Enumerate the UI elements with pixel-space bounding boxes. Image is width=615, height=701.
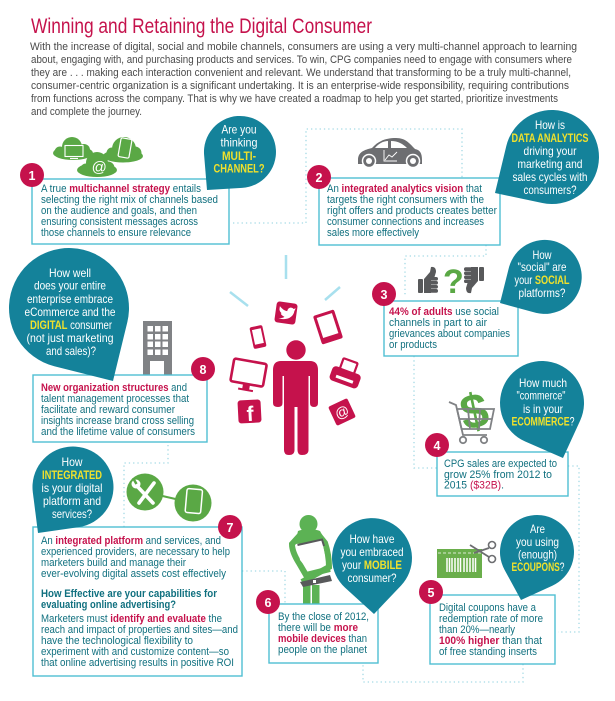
question bubble 7: is your digital (42, 481, 102, 495)
body text: marketers build and manage their (41, 557, 186, 569)
text box (32, 179, 229, 244)
intro paragraph: from functions across the company. That is why we have created a roadmap to help you get started, prioritize investments (31, 93, 558, 105)
icon: tablet (313, 309, 343, 345)
question bubble 7: INTEGRATED (42, 468, 102, 482)
icon: twitter (274, 301, 298, 325)
question bubble 6: consumer? (348, 571, 397, 585)
body text: A true multichannel strategy entails (41, 183, 201, 195)
text box (437, 452, 568, 496)
intro paragraph: and complete the journey. (31, 106, 142, 118)
panel 6: mobile (256, 515, 412, 663)
number badge 7: 7 (227, 521, 234, 535)
body text: channels in part to air (389, 317, 487, 329)
icon: phone (249, 325, 267, 349)
body text: facilitate and reward consumer (41, 404, 175, 416)
question bubble 3: How (532, 248, 552, 262)
question bubble 8: DIGITAL consumer (30, 318, 112, 332)
body text: those channels to ensure relevance (41, 227, 191, 239)
question bubble 2: consumers? (524, 183, 577, 197)
question bubble 8: How well (49, 266, 91, 280)
body text: or products (389, 339, 437, 351)
number badge 6: 6 (265, 596, 272, 610)
question bubble 4: How much (519, 376, 567, 390)
text box (384, 301, 518, 356)
icon: at sign: @ (332, 402, 352, 422)
number badge 1 (20, 163, 44, 187)
body text: 2015 ($32B). (444, 480, 504, 492)
question bubble 5: ECOUPONS? (512, 560, 565, 574)
body text: targets the right consumers with the (327, 194, 484, 206)
body text (439, 602, 543, 658)
icon: clouds with devices (53, 137, 143, 177)
intro paragraph (30, 41, 577, 118)
icon: monitor (229, 358, 267, 394)
question bubble 8: and sales)? (46, 344, 96, 358)
number badge 1: 1 (29, 169, 36, 183)
body text: sales more effectively (327, 227, 419, 239)
body text: New organization structures and (41, 382, 187, 394)
text box (269, 604, 378, 663)
question bubble 1: thinking (220, 136, 258, 150)
number badge 2: 2 (316, 171, 323, 185)
question bubble 3: "social" are (518, 260, 567, 274)
question bubble 2: sales cycles with (512, 170, 588, 184)
icon: facebook: f (246, 403, 255, 426)
body text: insights increase brand cross selling (41, 415, 194, 427)
body text (278, 611, 369, 656)
icon: clouds with devices: @ (91, 159, 107, 176)
text box (33, 375, 207, 442)
number badge 4: 4 (434, 439, 441, 453)
icon: thumbs up (418, 267, 438, 293)
icon: car with chart (358, 138, 422, 168)
question bubble 7: platform and (43, 494, 101, 508)
question bubble 4: "commerce" (516, 388, 566, 402)
question bubble 2 (495, 110, 599, 204)
icon: facebook (237, 399, 262, 427)
body text: 100% higher than that (439, 635, 542, 647)
question bubble 7: How (62, 455, 83, 469)
question bubble 6: you embraced (340, 545, 404, 559)
body text: grow 25% from 2012 to (444, 469, 552, 481)
body text: mobile devices than (278, 633, 367, 645)
number badge 4 (425, 433, 449, 457)
number badge 8 (191, 357, 215, 381)
question bubble 5 (500, 515, 574, 600)
body text (41, 382, 195, 438)
question bubble 1: MULTI- (222, 149, 256, 163)
number badge 5 (419, 580, 443, 604)
question bubble 4 (500, 361, 584, 458)
number badge 8: 8 (200, 363, 207, 377)
body text: reach and impact of properties and sites—and (41, 624, 238, 636)
panel 4: ecommerce (425, 361, 584, 496)
question bubble 4: is in your (523, 402, 563, 416)
question bubble 8: eCommerce and the (24, 305, 116, 319)
body text: redemption rate of more (439, 613, 543, 625)
icon: thumbs down (464, 267, 484, 293)
intro paragraph: With the increase of digital, social and mobile channels, consumers are using a very multi-channel approach to learning (30, 41, 577, 53)
body text: people on the planet (278, 644, 367, 656)
body text: ensuring consistent messages across (41, 216, 198, 228)
body text: have the technological flexibility to (41, 635, 193, 647)
question bubble 2: marketing and (518, 157, 582, 171)
body text: 44% of adults use social (389, 306, 499, 318)
icon: scissors (470, 542, 496, 562)
body text: and the lifetime value of consumers (41, 426, 195, 438)
panel 1: multichannel (20, 116, 276, 244)
number badge 3 (372, 282, 396, 306)
person (273, 340, 318, 455)
question bubble 6: How have (350, 532, 395, 546)
icon: office building (143, 321, 172, 375)
question bubble 4: ECOMMERCE? (512, 414, 575, 428)
body text: of free standing inserts (439, 646, 537, 658)
body text: there will be more (278, 622, 358, 634)
icon: at sign (328, 398, 356, 426)
body text (41, 535, 238, 669)
icon: person holding tablet (292, 515, 332, 605)
body text: consumer connections and increases (327, 216, 484, 228)
question bubble 3: your SOCIAL (514, 273, 570, 287)
question bubble 8: enterprise embrace (27, 292, 113, 306)
question bubble 1: CHANNEL? (214, 162, 264, 176)
question bubble 7 (32, 447, 113, 533)
body text: An integrated analytics vision that (327, 183, 482, 195)
icon: shopping cart with dollar sign: $ (455, 383, 493, 441)
intro paragraph: consumer-centric organization is a significant undertaking. It is an enterprise-wide responsibility, requiring contributions (31, 80, 569, 92)
question bubble 8: does your entire (34, 278, 106, 292)
panel 7: integrated platform (32, 447, 242, 676)
body text: CPG sales are expected to (444, 458, 557, 470)
question bubble 3: platforms? (518, 286, 566, 300)
question bubble 8: (not just marketing (26, 331, 114, 345)
rays (230, 255, 340, 306)
text box (33, 527, 242, 676)
question bubble 2: How is (535, 118, 565, 132)
central figure with device icons (229, 255, 365, 455)
question bubble 5: you using (516, 535, 559, 549)
body text (327, 183, 497, 239)
body text: that online advertising results in positive ROI (41, 657, 234, 669)
question bubble 3 (500, 240, 582, 314)
question bubble 6: your MOBILE (342, 558, 402, 572)
body text: How Effective are your capabilities for (41, 588, 218, 600)
question bubble 5: Are (530, 522, 545, 536)
body text: right offers and products creates better (327, 205, 497, 217)
icon: tools and tablet circles (126, 474, 212, 522)
body text: than 20%—nearly (439, 624, 515, 636)
body text: Marketers must identify and evaluate the (41, 613, 222, 625)
question bubble 2: DATA ANALYTICS (512, 131, 588, 145)
icon: question mark: ? (443, 263, 464, 301)
body text: experienced providers, are necessary to help (41, 546, 230, 558)
question bubble 1 (204, 116, 276, 190)
intro paragraph: they are . . . making each interaction convenient and relevant. We understand that transforming to be a truly multi-channel, (31, 67, 571, 79)
body text: selecting the right mix of channels based (41, 194, 218, 206)
question bubble 1: Are you (222, 122, 256, 136)
body text: ever-evolving digital assets cost effectively (41, 568, 226, 580)
body text: An integrated platform and services, and (41, 535, 221, 547)
body text: talent management processes that (41, 393, 189, 405)
dotted connector path (124, 129, 579, 682)
text box (319, 178, 500, 245)
number badge 2 (307, 165, 331, 189)
title: Winning and Retaining the Digital Consumer (31, 15, 372, 38)
body text: By the close of 2012, (278, 611, 369, 623)
panel 8: organization (9, 248, 215, 442)
icon: coupon with barcode (437, 549, 482, 578)
body text: experiment with and customize content—so (41, 646, 229, 658)
body text: evaluating online advertising? (41, 599, 176, 611)
question bubble 5: (enough) (518, 548, 557, 562)
number badge 7 (218, 515, 242, 539)
panel 2: analytics (307, 110, 599, 245)
body text: on the audience and goals, and then (41, 205, 197, 217)
question bubble 7: services? (52, 507, 92, 521)
number badge 6 (256, 590, 280, 614)
question bubble 2: driving your (524, 144, 576, 158)
body text: Digital coupons have a (439, 602, 537, 614)
number badge 3: 3 (381, 288, 388, 302)
body text (41, 183, 218, 239)
question bubble 6 (332, 518, 412, 614)
body text (389, 306, 510, 351)
number badge 5: 5 (428, 586, 435, 600)
panel 5: ecoupons (419, 515, 574, 664)
text box (430, 595, 555, 664)
body text (444, 458, 557, 492)
question bubble 8 (9, 248, 129, 381)
panel 3: social (372, 240, 582, 356)
icon: printer (328, 356, 365, 390)
body text: grievances about companies (389, 328, 510, 340)
